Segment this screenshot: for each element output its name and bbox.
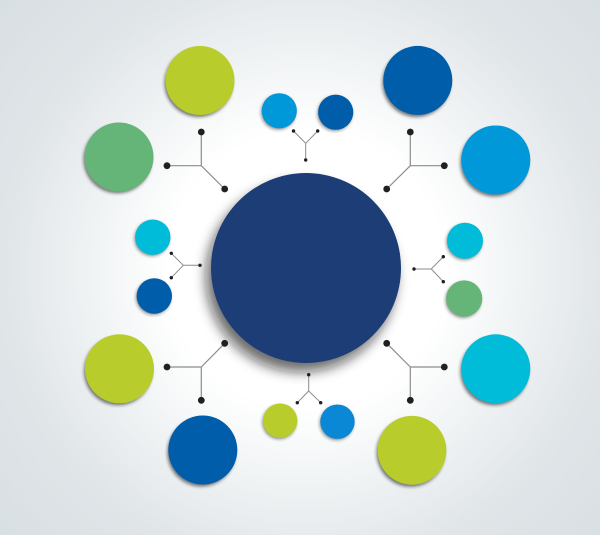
circle: bottom small lime: [262, 404, 297, 439]
connector: top small: [292, 129, 319, 162]
circle: lower-left lime: [84, 334, 154, 405]
connector: left small: [170, 252, 202, 279]
connector: upper-right: [383, 129, 448, 192]
circle: upper-left green: [84, 122, 154, 193]
circle: bottom-right lime: [376, 416, 446, 487]
circle: upper-right blue: [460, 126, 530, 196]
connector: right small: [412, 255, 445, 283]
circle: left cyan: [134, 220, 170, 256]
circle: right green: [446, 280, 482, 318]
circle: top-right dark blue: [382, 46, 452, 117]
circle: top-left lime: [164, 46, 234, 117]
circle: right cyan: [446, 223, 483, 260]
connector: lower-right: [383, 340, 448, 404]
circle: top small blue: [261, 93, 297, 130]
circle: top small dark blue: [318, 95, 353, 131]
central circle: [206, 173, 401, 372]
circle: bottom-left dark blue: [167, 416, 237, 486]
circle: lower-right cyan: [460, 334, 530, 405]
connector: upper-left: [164, 129, 228, 192]
connector: bottom small: [296, 373, 322, 404]
circle: left dark blue: [136, 278, 172, 315]
connector: lower-left: [164, 340, 228, 404]
circle: bottom small blue: [320, 404, 355, 440]
